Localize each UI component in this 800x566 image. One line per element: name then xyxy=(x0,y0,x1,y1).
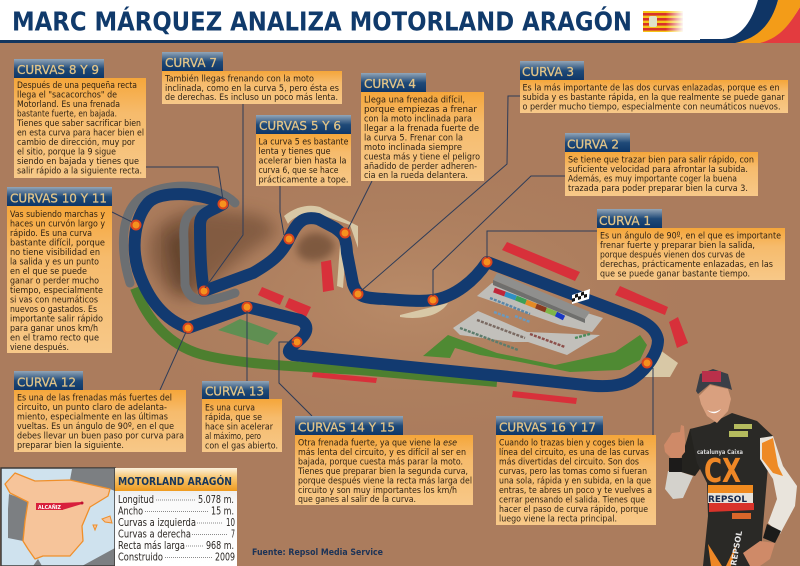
panel: curvas 10 y 11: CURVAS 10 Y 11 xyxy=(10,192,107,206)
panel: curvas 10 y 11: para ganar unos km/h xyxy=(10,323,98,334)
panel: curva 4: cuesta más y tiene el peligro xyxy=(364,152,480,162)
beige run-off areas xyxy=(284,206,678,377)
panel: curva 4: con la moto inclinada para xyxy=(364,114,472,124)
panel: curvas 10 y 11: si vas con neumáticos xyxy=(10,294,98,306)
panel: curvas 16 y 17: una sola, rápida y en subida, en la que xyxy=(499,476,651,486)
panel: curvas 16 y 17: cerrar pensando el salida. Tienes que xyxy=(499,494,645,506)
stats table: 7 xyxy=(231,530,235,540)
panel: curva 1: porque después vienen dos curvas de xyxy=(600,250,745,260)
panel: curva 4 xyxy=(361,73,484,181)
panel: curva 4: llegar a la frenada fuerte de xyxy=(364,123,479,134)
panel: curva 2: suficiente velocidad para afrontar la subida. xyxy=(568,164,748,175)
panel: curvas 8 y 9: Motorland. Es una frenada xyxy=(17,99,120,110)
panel: curvas 10 y 11: ganar o perder mucho xyxy=(10,276,99,286)
panel: curvas 16 y 17: más divertidas del circuito. Son dos xyxy=(499,456,639,468)
stats table: 2009 xyxy=(215,552,235,564)
vertical repsol on leg: REPSOL xyxy=(729,530,744,566)
sponsor text: catalunya Caixa xyxy=(697,449,743,456)
panel: curvas 14 y 15: circuito y son muy importantes los km/h xyxy=(298,485,457,496)
panel: curva 2: Se tiene que trazar bien para salir rápido, con xyxy=(568,154,754,166)
panel: curvas 10 y 11 xyxy=(7,187,112,353)
stats table: 15 m. xyxy=(211,506,234,518)
curve markers xyxy=(132,200,652,368)
hill shadow near curve 6 xyxy=(297,233,335,261)
panel: curvas 10 y 11: viene después. xyxy=(10,342,69,353)
cap xyxy=(696,369,732,394)
panel: curvas 5 y 6: curva 6, que se hace xyxy=(258,165,339,176)
panel: curva 7 xyxy=(162,52,342,104)
panel: curvas 14 y 15: que ganes al salir de la curva. xyxy=(298,494,416,505)
stats table: Construido xyxy=(118,552,163,564)
panel: curva 7: de derechas. Es incluso un poco más lenta. xyxy=(165,92,338,103)
panel: curvas 16 y 17: Cuando lo trazas bien y coges bien la xyxy=(499,438,644,448)
grey run-off inner xyxy=(184,209,235,300)
panel: curva 2: trazada para poder preparar bien la curva 3. xyxy=(568,183,748,194)
panel: curvas 5 y 6: prácticamente a tope. xyxy=(258,174,348,186)
stats table: Ancho xyxy=(118,506,143,518)
connector lines xyxy=(112,96,653,435)
panel: curva 4: cia en la rueda delantera. xyxy=(364,170,468,181)
panel: curva 1: CURVA 1 xyxy=(599,214,651,228)
panel: curva 1 xyxy=(597,209,785,280)
panel: curvas 10 y 11: no tiene visibilidad en xyxy=(10,247,100,258)
glove cuff xyxy=(669,458,682,472)
rider left upper arm xyxy=(681,426,712,476)
panel: curvas 10 y 11: tiempo, especialmente xyxy=(10,285,103,296)
torso xyxy=(690,413,773,566)
panel: curvas 10 y 11: en el que se puede xyxy=(10,266,87,277)
panel: curva 12: Es una de las frenadas más fuertes del xyxy=(17,392,172,404)
stats table xyxy=(115,468,237,566)
panel: curvas 14 y 15 xyxy=(295,416,473,505)
panel: curva 4: Llega una frenada difícil, xyxy=(364,94,465,106)
panel: curva 12 xyxy=(14,371,186,452)
panel: curvas 8 y 9 xyxy=(14,59,146,178)
panel: curva 12: debes llevar un buen paso por curva para xyxy=(17,430,184,442)
stats table: Longitud xyxy=(118,495,154,506)
locator map of Spain xyxy=(1,468,115,566)
panel: curvas 16 y 17: entras, te abres un poco y te vuelves a xyxy=(499,485,652,496)
darker inner shade of the hill xyxy=(168,225,190,290)
panel: curva 13: Es una curva xyxy=(205,402,255,414)
rider photo illustration xyxy=(664,369,797,566)
panel: curva 4: la curva 5. Frenar con la xyxy=(364,132,463,144)
panel: curvas 5 y 6 xyxy=(256,115,351,186)
chest sponsor patches xyxy=(729,424,752,437)
hill shadow near curves 8 and 9 xyxy=(150,209,275,298)
title: MARC MÁRQUEZ ANALIZA MOTORLAND ARAGÓN xyxy=(12,6,632,38)
panel: curvas 8 y 9: siendo en bajada y tienes que xyxy=(17,156,139,167)
panel: curvas 14 y 15: Otra frenada fuerte, ya que viene la ese xyxy=(298,438,457,448)
panel: curvas 16 y 17: CURVAS 16 Y 17 xyxy=(499,420,596,434)
Repsol band xyxy=(708,485,754,512)
white sleeve xyxy=(665,471,693,499)
panel: curvas 10 y 11: importante salir rápido xyxy=(10,314,103,324)
panel: curvas 8 y 9: CURVAS 8 Y 9 xyxy=(17,63,99,77)
face xyxy=(699,385,731,423)
panel: curvas 5 y 6: CURVAS 5 Y 6 xyxy=(259,119,341,133)
stats table: 10 xyxy=(226,518,235,529)
pit lane arrows xyxy=(534,280,562,294)
finish line flag xyxy=(572,289,590,304)
panel: curva 2 xyxy=(565,133,758,196)
panel: curvas 10 y 11: haces un curvón largo y xyxy=(10,218,105,230)
track xyxy=(135,194,658,386)
panel: curva 12: CURVA 12 xyxy=(17,376,76,390)
stats table: 968 m. xyxy=(206,541,234,552)
stats table: Recta más larga xyxy=(118,540,185,552)
cap logo xyxy=(702,371,721,382)
right hand xyxy=(743,541,775,566)
panel: curvas 8 y 9: el sitio, porque la 9 sigue xyxy=(17,146,116,158)
small sponsor patch xyxy=(732,513,751,519)
panel: curvas 10 y 11: nuevos o gastados. Es xyxy=(10,304,97,315)
grey run-off outer xyxy=(123,186,235,283)
smile xyxy=(707,409,721,413)
panel: curva 2: Además, es muy importante coger la buena xyxy=(568,174,737,184)
Repsol band: REPSOL xyxy=(708,495,747,505)
panel: curvas 14 y 15: porque después viene la recta más larga del xyxy=(298,476,472,486)
panel: curva 4: añadido de perder adheren- xyxy=(364,161,477,172)
panel: curva 13: CURVA 13 xyxy=(205,384,264,398)
right arm sleeve xyxy=(760,436,797,534)
panel: curvas 14 y 15: bajada, porque cuesta más parar la moto. xyxy=(298,456,463,468)
stats table: Curvas a derecha xyxy=(118,530,191,540)
panel: curva 4: moto inclinada siempre xyxy=(364,142,462,153)
stats table: MOTORLAND ARAGÓN xyxy=(118,475,232,488)
orange shoulder xyxy=(762,438,783,476)
panel: curvas 10 y 11: rápido. Es una curva xyxy=(10,228,92,239)
panel: curvas 10 y 11: la salida y es un punto xyxy=(10,256,99,268)
panel: curvas 16 y 17: hacer el paso de curva rápido, porque xyxy=(499,504,648,515)
panel: curvas 5 y 6: La curva 5 es bastante xyxy=(258,136,349,148)
thumb-up hand xyxy=(664,425,685,458)
panel: curva 4: CURVA 4 xyxy=(364,77,416,91)
source credit: Fuente: Repsol Media Service xyxy=(252,548,383,558)
panel: curva 2: CURVA 2 xyxy=(567,138,619,152)
panel: curva 7: inclinada, como en la curva 5, pero ésta es xyxy=(165,83,339,94)
panel: curvas 10 y 11: Vas subiendo marchas y xyxy=(10,209,105,220)
panel: curvas 8 y 9: salir rápido a la siguiente recta. xyxy=(17,166,142,176)
panel: curva 1: derechas, prácticamente enlazadas, en las xyxy=(600,259,773,270)
panel: curvas 5 y 6: acelerar bien hasta la xyxy=(258,156,346,166)
paddock xyxy=(453,273,603,355)
panel: curvas 10 y 11: bastante difícil, porque xyxy=(10,238,105,248)
panel: curva 13: rápida, que se xyxy=(205,412,262,423)
panel: curvas 8 y 9: en esta curva para hacer bien el xyxy=(17,128,144,138)
panel: curva 12: vueltas. Es un ángulo de 90º, en el que xyxy=(17,421,174,432)
stats table: Curvas a izquierda xyxy=(118,518,196,529)
panel: curva 13: con el gas abierto. xyxy=(205,440,278,452)
panel: curvas 8 y 9: bastante fuerte, en bajada. xyxy=(17,108,117,120)
green infield xyxy=(423,335,647,372)
panel: curva 13: al máximo, pero xyxy=(205,431,261,442)
panel: curva 1: frenar fuerte y preparar bien la salida, xyxy=(600,240,755,251)
stats table: 5.078 m. xyxy=(198,495,234,506)
panel: curva 12: preparar bien la siguiente. xyxy=(17,440,124,451)
red gravel barriers xyxy=(258,242,688,404)
header band xyxy=(0,0,800,43)
panel: curvas 16 y 17 xyxy=(496,416,656,525)
panel: curvas 8 y 9: cambio de dirección, muy por xyxy=(17,137,135,148)
panel: curva 13 xyxy=(202,381,282,452)
panel: curvas 14 y 15: Tienes que preparar bien la segunda curva, xyxy=(297,466,468,477)
panel: curvas 5 y 6: lenta y tienes que xyxy=(258,146,331,157)
panel: curva 7: CURVA 7 xyxy=(165,56,217,70)
panel: curvas 8 y 9: llega el "sacacorchos" de xyxy=(17,90,117,100)
orange CX logo: CX xyxy=(704,451,741,490)
panel: curva 12: circuito, un punto claro de adelanta- xyxy=(17,402,167,413)
leg stripes xyxy=(708,543,737,566)
panel: curvas 10 y 11: en el tramo recto que xyxy=(10,332,99,344)
icon: Aragon flag xyxy=(643,10,684,33)
circuit map xyxy=(123,186,688,404)
panel: curva 3 xyxy=(520,61,788,113)
locator map of Spain: ALCAÑIZ xyxy=(38,504,61,511)
panel: curva 3: CURVA 3 xyxy=(522,65,574,79)
panel: curvas 16 y 17: luego viene la recta principal. xyxy=(499,514,617,524)
panel: curvas 16 y 17: línea del circuito, es una de las curvas xyxy=(499,447,649,458)
panel: curva 1: que se puede ganar bastante tiempo. xyxy=(600,268,750,280)
panel: curvas 14 y 15: más lenta del circuito, y es difícil al ser en xyxy=(298,447,466,458)
panel: curvas 8 y 9: Tienes que saber sacrificar bien xyxy=(16,118,141,129)
panel: curvas 16 y 17: curvas, pero las tomas como si fueran xyxy=(499,466,647,477)
panel: curvas 8 y 9: Después de una pequeña recta xyxy=(17,80,137,91)
panel: curvas 14 y 15: CURVAS 14 Y 15 xyxy=(298,420,395,434)
panel: curva 13: hace sin acelerar xyxy=(205,422,273,432)
panel: curva 7: También llegas frenando con la moto xyxy=(164,74,314,84)
panel: curva 12: miento, especialmente en las últimas xyxy=(17,412,168,422)
green run-off band xyxy=(135,288,497,382)
right cuff xyxy=(763,524,781,543)
panel: curva 4: porque empiezas a frenar xyxy=(364,104,477,115)
